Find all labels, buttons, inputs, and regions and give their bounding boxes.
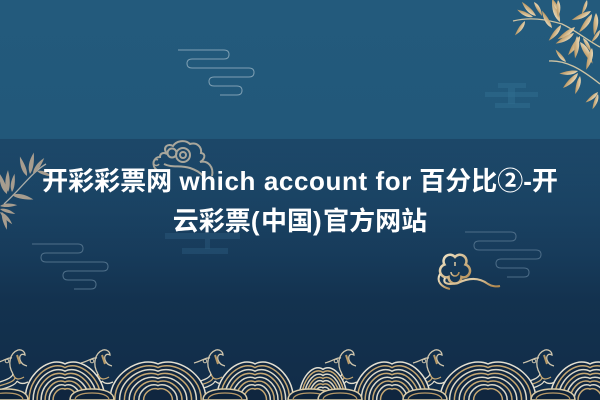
decorative line cloud: lower left	[32, 244, 108, 289]
faint block cloud: upper right	[485, 83, 538, 108]
ornate cloud behind title	[153, 141, 212, 176]
title: 开彩彩票网 which account for 百分比②-开	[42, 166, 558, 196]
title band	[0, 139, 600, 261]
decorative line cloud: upper left	[178, 50, 254, 95]
bamboo branch: upper right	[513, 0, 600, 110]
title	[42, 166, 558, 236]
faint block cloud: centre	[165, 233, 240, 254]
bamboo branch: left	[0, 152, 53, 230]
decorative line cloud: lower right	[465, 232, 541, 277]
golden cloud ornament	[439, 255, 500, 289]
ocean wave pattern	[0, 350, 600, 400]
title: 云彩票(中国)官方网站	[173, 206, 427, 236]
